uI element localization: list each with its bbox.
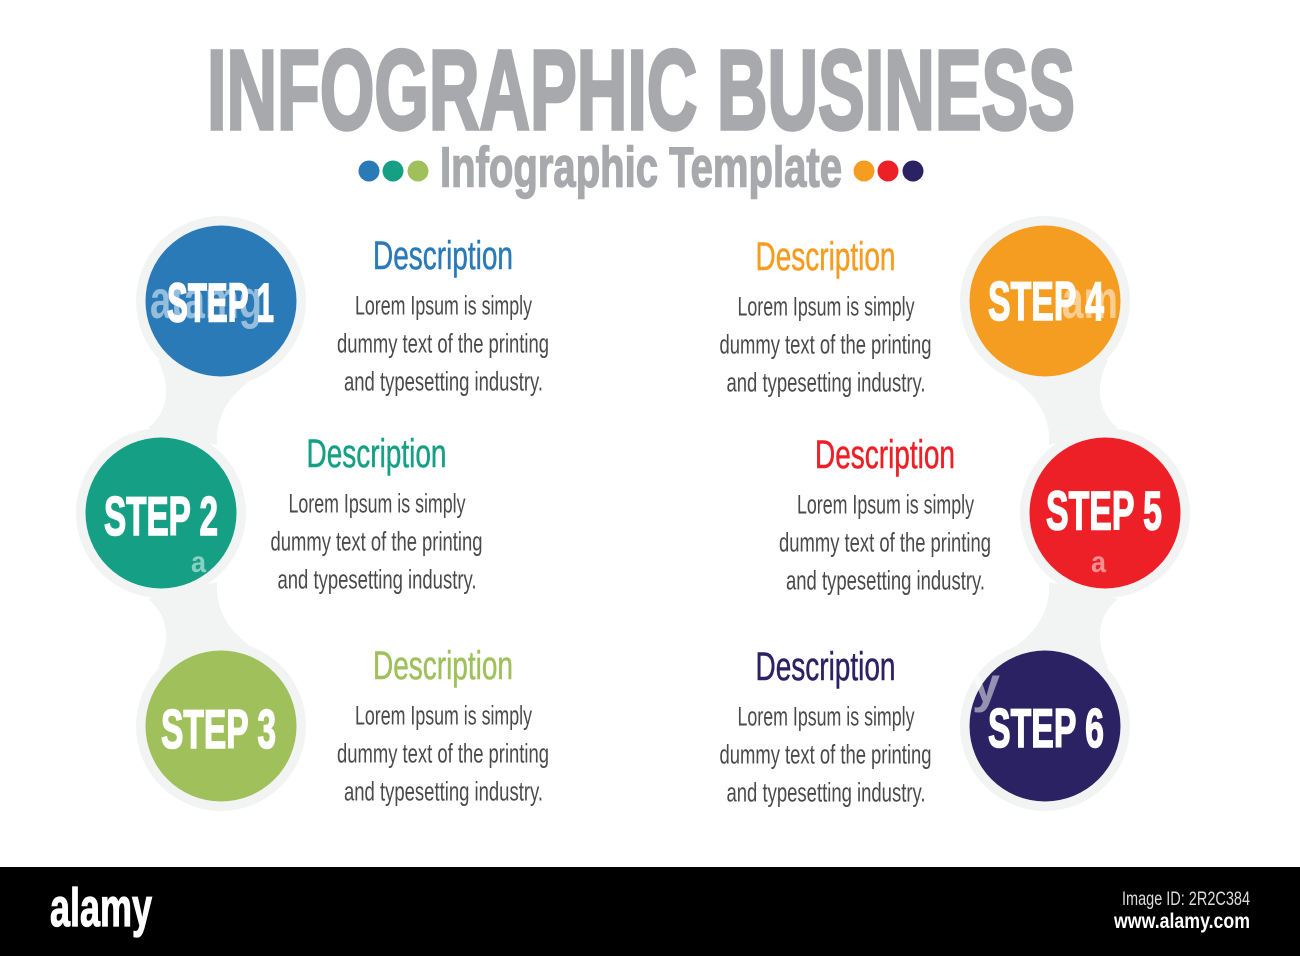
description block 3: Lorem Ipsum is simply [355,700,532,730]
step 5 circle: STEP 5 [1046,480,1162,542]
step 1 circle: STEP 1 [167,272,274,334]
step 3 circle [146,650,296,802]
step 4 circle: am [1062,270,1118,330]
description block 1: dummy text of the printing [337,328,549,358]
description block 2: dummy text of the printing [270,526,482,556]
left connector track [76,216,306,811]
description block 6: and typesetting industry. [726,778,926,808]
step 3 circle: STEP 3 [161,698,276,760]
subtitle row: Infographic Template [440,136,842,200]
footer bar: Image ID: 2R2C384 [1122,889,1250,910]
description block 1: Description [373,234,513,278]
description block 3: Description [373,644,513,688]
description block 6: dummy text of the printing [720,740,932,770]
step 6 circle: y [972,657,1000,713]
description block 3: and typesetting industry. [344,776,543,806]
step 6 circle [970,650,1120,802]
description block 4 [720,235,932,398]
step 4 circle [970,226,1120,376]
step 1 circle: atamg [150,270,262,330]
step 4 circle: STEP 4 [988,270,1104,332]
footer bar: www.alamy.com [1113,910,1250,933]
description block 3 [337,644,549,806]
description block 4: dummy text of the printing [720,330,932,360]
description block 5: Lorem Ipsum is simply [797,490,974,520]
description block 4: and typesetting industry. [726,368,926,398]
description block 2: Lorem Ipsum is simply [288,488,466,518]
step 2 circle: a [191,546,206,579]
step 2 circle [86,438,236,588]
step 5 circle: a [1091,546,1106,579]
footer bar: alamy [50,878,152,938]
description block 5: Description [815,433,955,477]
step 1 circle [146,226,296,376]
description block 2 [270,432,482,594]
description block 1: Lorem Ipsum is simply [355,290,532,320]
description block 3: dummy text of the printing [337,738,549,768]
step 5 circle [1030,438,1180,588]
step 2 circle: STEP 2 [104,485,218,547]
description block 5 [779,433,991,596]
step 6 circle: STEP 6 [988,697,1104,759]
description block 4: Lorem Ipsum is simply [738,292,915,322]
description block 1: and typesetting industry. [344,366,543,396]
description block 5: and typesetting industry. [786,566,985,596]
right connector track [960,216,1190,811]
description block 4: Description [756,235,896,279]
footer bar [0,867,1300,956]
description block 6: Description [756,645,896,689]
description block 5: dummy text of the printing [779,528,991,558]
description block 2: Description [306,432,446,476]
description block 2: and typesetting industry. [278,564,476,594]
description block 6: Lorem Ipsum is simply [738,702,915,732]
description block 1 [337,234,549,396]
description block 6 [720,645,932,808]
